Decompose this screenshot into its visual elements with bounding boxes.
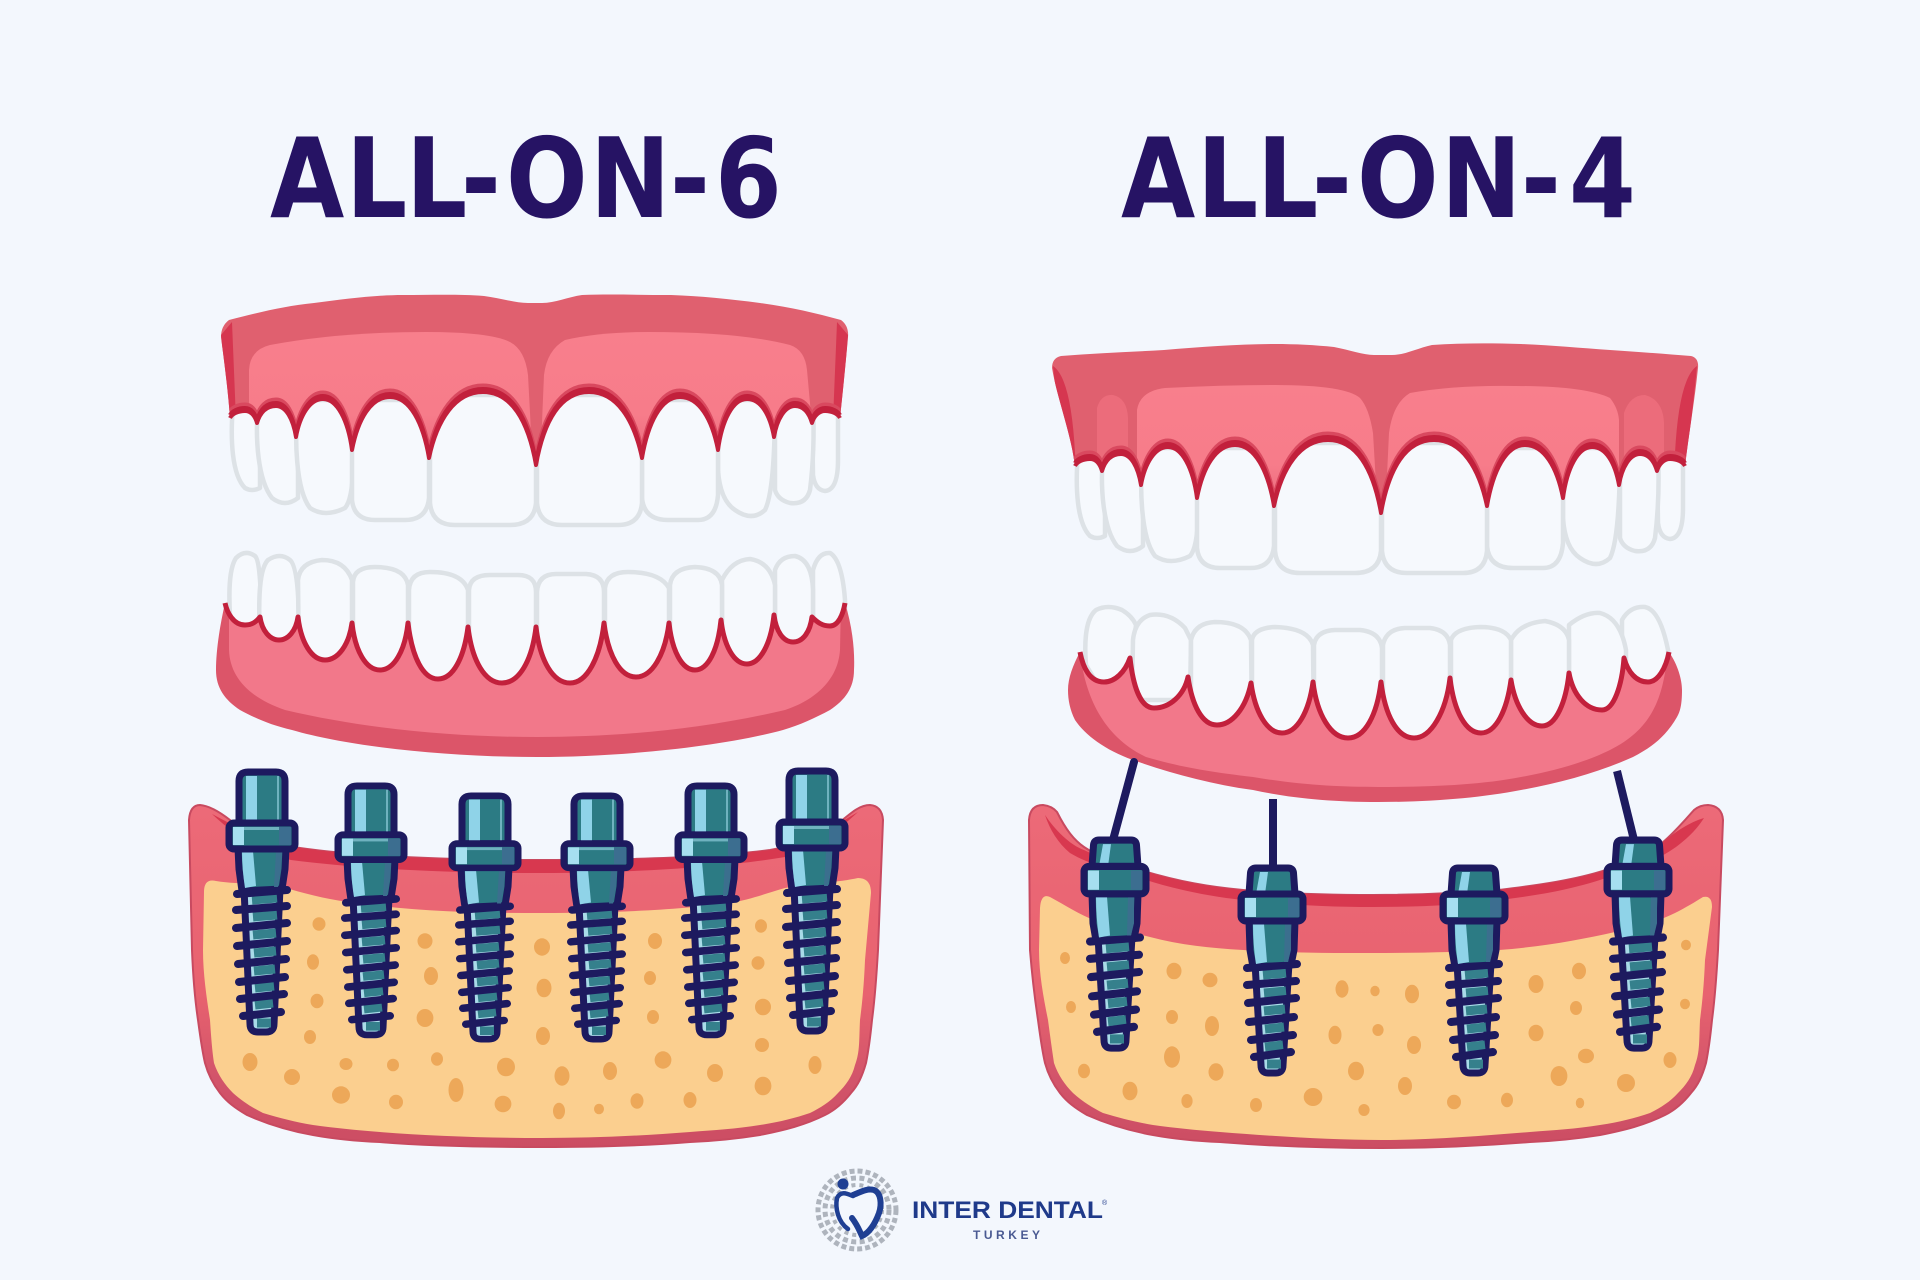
wordmark: INTER DENTAL xyxy=(912,1197,1103,1224)
panel: all-on-6 lower denture xyxy=(216,553,854,757)
title: ALL-ON-4: ALL-ON-4 xyxy=(1121,115,1636,244)
bone xyxy=(1039,896,1712,1140)
panel: all-on-6 upper denture xyxy=(221,295,848,525)
tagline: TURKEY xyxy=(973,1228,1040,1242)
panel: all-on-4 jaw and bone xyxy=(1029,805,1723,1148)
bone xyxy=(203,878,871,1138)
registered mark: ® xyxy=(1102,1199,1108,1207)
implants: six long implants xyxy=(229,771,845,1039)
connector lines from implants to denture xyxy=(1113,762,1634,868)
lower teeth xyxy=(229,553,845,695)
panel: all-on-4 lower denture xyxy=(1068,607,1682,802)
panel: all-on-4 upper denture xyxy=(1052,343,1698,573)
title: ALL-ON-6: ALL-ON-6 xyxy=(270,115,782,244)
panel: all-on-6 jaw and bone xyxy=(189,805,883,1147)
bone pores xyxy=(242,917,822,1119)
icon: dotted globe with tooth xyxy=(818,1171,896,1249)
bone pores xyxy=(1060,940,1691,1116)
logo: Inter Dental Turkey xyxy=(818,1171,1108,1249)
lower teeth xyxy=(1085,607,1670,745)
implants: four short implants xyxy=(1084,840,1669,1073)
